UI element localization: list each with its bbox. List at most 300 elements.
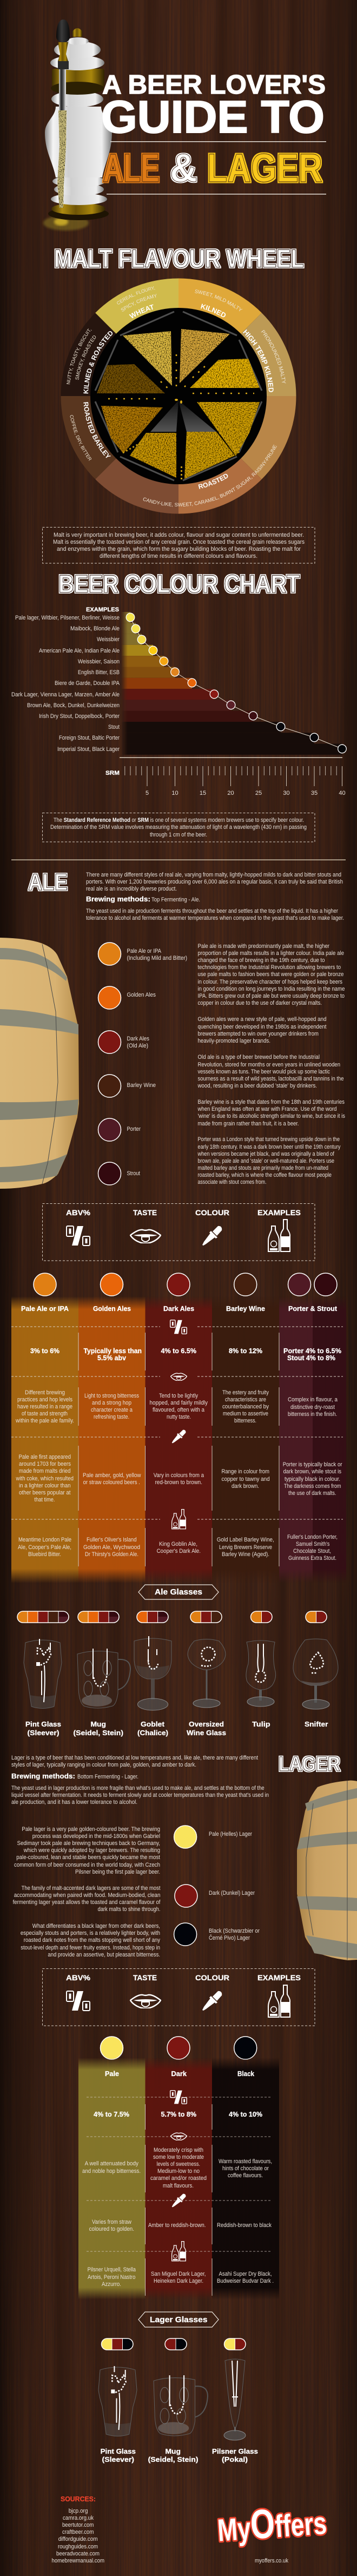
heading: beer colour chart: BEER COLOUR CHART [58,570,300,598]
taste row: hopped, and fairly mildly [149,1400,208,1406]
ale style colour list: Dark Ales [127,1036,149,1042]
lager table colour swatches [101,2037,257,2059]
callout: malt explanation: Malt is very important in brewing beer, it adds colour, flavour and sugar content to unfermented beer. [54,532,304,538]
taste row: levels of sweetness. [157,2161,200,2167]
srm axis: 30 [283,790,290,796]
examples row: Gold Label Barley Wine, [217,1537,274,1543]
ale style descriptions: malted barley and stouts are primarily made from un-malted [198,1165,328,1171]
taste row: nutty taste. [167,1414,191,1420]
lager glass names: Pilsner Glass [212,2447,258,2455]
icon: lips [130,1230,161,1243]
lager glass names: (Seidel, Stein) [148,2455,199,2463]
callout: malt explanation: different lengths of time results in different colours and flavours. [100,553,257,559]
lager style colour list [174,1826,260,1946]
column headers: Barley Wine [226,1305,265,1313]
illustration: lager barrel [297,1781,357,1960]
abv row: 4% to 10% [229,2110,262,2118]
logo: myoffers: MyOffers [216,2497,328,2551]
examples row: King Goblin Ale, [159,1541,197,1547]
colour row: made from malts dried [19,1468,70,1474]
examples row: Cooper's Dark Ale. [157,1548,201,1554]
colour row: Porter is typically black or [283,1461,342,1468]
taste row: within the pale ale family. [15,1418,74,1424]
title [101,70,326,195]
hub shaded wedges [150,400,178,432]
chart example labels: Irish Dry Stout, Doppelbock, Porter [39,713,120,720]
ale style descriptions: roasted barley, which is where the coffee flavour most people [198,1172,332,1178]
ale style descriptions: wood, resulting in a beer dubbed 'stale' by drinkers. [197,1083,317,1089]
ale glass names [25,1720,328,1737]
ale style colour list [98,943,187,1185]
ale style descriptions [197,943,345,1185]
srm axis: SRM [105,770,120,776]
ale glass names: (Seidel, Stein) [74,1729,123,1737]
taste row: some low to moderate [153,2154,204,2160]
icon: lips [171,1373,187,1381]
column headers: Pale [105,2070,119,2078]
colour row: dark brown, while stout is [283,1468,341,1475]
glass: mug [154,2375,208,2436]
malt grain wedges [97,329,260,479]
sources list: SOURCES: [61,2495,96,2503]
examples row: Bluebird Bitter. [28,1551,61,1558]
lager style descriptions: pale-coloured, lean and stable beers quickly became the most [16,1854,160,1861]
examples row: Ale, Cooper's Pale Ale, [18,1544,71,1551]
malt flavour wheel [61,278,296,514]
ale style descriptions: associate with stout comes from. [198,1179,266,1185]
taste row: have resulted in a range [17,1404,72,1410]
sources list: beertutor.com [62,2522,94,2528]
ale comparison table columns [11,1296,346,1583]
ale style descriptions: vessels known as tuns. The beer would pick up some lactic [198,1069,330,1075]
lager style descriptions: and provide an assertive, but pleasant bitterness. [48,1952,160,1958]
lager intro text [11,1755,269,1806]
examples row: Budweiser Budvar Dark . [217,2278,274,2284]
heading: malt flavour wheel: MALT FLAVOUR WHEEL [54,244,304,273]
taste row: characteristics are [225,1396,266,1403]
abv row: Typically less than [83,1347,142,1355]
lager glass colour pills [102,2338,246,2350]
srm axis: 25 [255,790,262,796]
lager glasses illustrations [98,2359,246,2440]
title line: a beer lover's: A BEER LOVER'S [102,70,326,100]
taste row: coffee flavours. [228,2172,263,2179]
lager style descriptions: Pilsner being the first pale lager beer. [75,1869,160,1875]
ale style colour list: Pale Ale or IPA [127,948,162,954]
lager style descriptions: What differentiates a black lager from other dark beers, [32,1923,160,1929]
segment label: wheat: CEREAL, FLOURY, [117,286,155,304]
colour row: or straw coloured beers . [83,1479,140,1486]
examples row: Chocolate Stout, [293,1548,331,1554]
examples row [88,2267,274,2288]
chart example labels: Foreign Stout, Baltic Porter [59,735,120,741]
column headers: Golden Ales [93,1305,131,1313]
taste row: practices and hop levels [17,1396,72,1403]
chart example labels: EXAMPLES [86,607,119,613]
colour row: Varies from straw [92,2219,131,2225]
taste row: caramel and/or roasted [150,2175,207,2182]
icon: dropper [172,2194,186,2207]
pill: pint glass [102,2338,133,2350]
srm axis: 20 [227,790,234,796]
ale style colour list: (Including Mild and Bitter) [127,955,187,961]
legend panel: lager [42,1968,315,2026]
hub frame bevels [95,312,262,480]
examples row: Lervig Brewers Reserve [219,1544,272,1551]
lager style descriptions [13,1826,161,1958]
icon: bottles [172,2242,186,2261]
taste row: of taste and strength [22,1411,68,1417]
lager style descriptions: Sedimayr took pale ale brewing techniques back to Germany, [17,1840,160,1847]
icon: percent [67,1226,90,1246]
title rule upper [110,141,326,142]
segment label: roasted barley [69,400,113,464]
ale style descriptions: when versions became jet black, and was originally a blend of [197,1151,335,1157]
ale glass colour pills [17,1611,327,1623]
chart example labels: English Bitter, ESB [78,669,120,676]
icon: dropper [172,1430,186,1443]
icon: percent [170,2091,187,2104]
examples row: San Miguel Dark Lager, [151,2271,206,2277]
wheel hub [90,308,267,484]
lager style colour list: Black (Schwarzbier or [209,1928,260,1934]
taste row: refreshing taste. [94,1414,129,1420]
colour row: coloured to golden. [89,2226,134,2232]
ale glass names: Wine Glass [187,1729,226,1737]
segment label: roasted: CANDY-LIKE, SWEET, CARAMEL, BURNT SUGAR, RAISINY-PRUNE [143,445,277,507]
colour row: the use of dark malts. [288,1490,336,1497]
colour row: around 1703 for beers [19,1461,71,1467]
taste row: Light to strong bitterness [84,1393,139,1399]
abv row: Porter 4% to 6.5% [283,1347,341,1355]
colour row [89,2219,272,2232]
callout: srm explanation [42,813,315,842]
examples row: Golden Ale, Wychwood [83,1544,140,1551]
colour row: Amber to reddish-brown. [148,2222,206,2229]
abv row: 3% to 6% [30,1347,60,1355]
illustration: ale barrel [0,938,79,1189]
title word: ale: ALE [103,146,160,190]
segment label: kilned and roasted: SMOKEY, ROASTED [75,335,96,380]
abv row [30,1347,341,1362]
column headers [21,1305,338,1313]
column headers: Porter & Strout [288,1305,338,1313]
segment label: kilned and roasted [65,325,115,394]
ale style descriptions: heavily-promoted lager brands. [198,1038,270,1044]
segment label: kilned and roasted: KILNED & ROASTED [83,331,113,394]
colour row: The darkness comes from [284,1483,341,1490]
ale intro text: real ale is an incredibly diverse product. [86,886,177,892]
chart bars [121,612,342,755]
colour row: dark brown. [232,1483,259,1490]
examples row: Dr Thirsty's Golden Ale. [85,1551,138,1558]
heading: lager: LAGER [279,1753,340,1776]
chart example labels: Weissbier, Saison [78,658,120,665]
lager style descriptions: fermenting lager yeast allows the toasted and caramel flavour of [13,1899,161,1906]
title rule lower [107,194,326,195]
beer colour chart [11,607,346,796]
abv row: 4% to 7.5% [94,2110,129,2118]
examples row: Barley Wine (Aged). [222,1551,269,1558]
colour row: copper to tawny and [222,1476,270,1483]
ale style descriptions: copper in colour due to the use of darker crystal malts. [198,1000,322,1006]
chart example labels: Biere de Garde, Double IPA [55,680,120,687]
taste row: medium to assertive [223,1411,268,1417]
icon: bottles [268,1220,290,1251]
ale style descriptions: brewers attempted to win over younger drinkers from [198,1031,319,1037]
lager intro text: Lager is a type of beer that has been conditioned at low temperatures and, like ale, there are many different [11,1755,258,1761]
lager style descriptions: which were quickly adopted by lager brewers. The resulting [23,1847,160,1854]
chart example labels: Dark Lager, Vienna Lager, Marzen, Amber Ale [11,691,120,698]
segment label: roasted barley: ROASTED BARLEY [83,402,111,458]
lager style descriptions: common form of beer consumed in the world today, with Czech [14,1862,160,1868]
chart example labels: Brown Ale, Bock, Dunkel, Dunkelweizen [27,702,120,709]
chart markers [126,613,346,753]
ale style descriptions: changed the face of brewing in the 19th century, due to [198,957,325,964]
lager style descriptions: dark malts to shine through. [98,1906,160,1913]
taste row: Tend to be lightly [159,1393,198,1399]
segment label: kilned: SWEET, MILD MALTY [195,289,242,312]
taste row: malt flavours. [163,2183,194,2189]
segment label: wheat: WHEAT [129,304,154,318]
lager glass names [101,2447,258,2463]
colour row: Pale amber, gold, yellow [83,1472,141,1479]
legend panel: lager: ABV% [66,1973,91,1982]
chart example labels: Stout [108,724,120,730]
icon: dropper [202,1991,222,2011]
ale style descriptions: Golden ales were a new style of pale, well-hopped and [198,1016,327,1023]
chart example labels: Pale lager, Witbier, Pilsener, Berliner, Weisse [15,615,120,621]
badge: ale glasses: Ale Glasses [155,1587,202,1597]
ale glass names: Goblet [141,1720,165,1728]
lager style descriptions: especially stouts and porters, is a relatively lighter body, with [21,1930,160,1936]
ale glass names: (Chalice) [137,1729,168,1737]
badge: ale glasses [138,1585,219,1599]
lager intro text: styles of lager, typically ranging in colour from pale, golden, and amber to dark. [11,1762,196,1768]
ale intro text: Top Fermenting - Ale. [151,897,200,903]
srm axis: 40 [339,790,346,796]
abv row: 5.7% to 8% [161,2110,196,2118]
segment label: roasted barley: COFFEE, DRY, BITTER [70,415,91,461]
segment label: kilned and roasted: NUTTY, TOASTY, BISCUIT, [67,328,92,384]
abv row: 5.5% abv [97,1354,127,1362]
badge: lager glasses: Lager Glasses [150,2315,208,2324]
sources list: beeradvocate.com [56,2551,100,2557]
sources list: craftbeer.com [62,2529,94,2535]
colour row: typically black in colour. [285,1476,340,1483]
abv row: 8% to 12% [229,1347,262,1355]
ale style descriptions: when England was often at war with France. Use of the word [197,1106,336,1112]
pill: goblet [137,1611,168,1623]
glass: snifter [293,1639,338,1709]
taste row: Moderately crisp with [154,2147,203,2153]
title word: lager: LAGER [207,146,322,190]
ale style colour list: (Old Ale) [127,1043,148,1049]
taste row: bitterness in the finish. [288,1411,337,1418]
lager style descriptions: The family of malt-accented dark lagers are some of the most [22,1885,160,1892]
icon: bottles [172,1510,186,1529]
examples row: Meantime London Pale [18,1537,71,1543]
abv row [94,2110,262,2118]
ale style descriptions: Pale ale is made with predominantly pale malt, the higher [198,943,329,950]
examples row: Asahi Super Dry Black, [219,2271,272,2277]
column headers [105,2070,255,2078]
srm axis: 10 [171,790,178,796]
segment label: wheat: SPICY, CREAMY [121,294,157,312]
taste row: A well attenuated body [85,2160,138,2167]
ale style colour list: Porter [127,1126,141,1132]
pill: pilsner glass [224,2338,246,2350]
glass: pint [24,1639,62,1709]
lager style descriptions: roasted dark notes from the malts stopping well short of any [24,1937,160,1943]
ale glass names: Mug [91,1720,106,1728]
taste row: hints of chocolate or [222,2165,269,2172]
lager intro text: ale production, and it has a lower tolerance to alcohol. [11,1799,137,1806]
title ampersand: & [170,146,197,190]
chart example labels: American Pale Ale, Indian Pale Ale [39,648,120,654]
colour row [16,1454,342,1503]
pill: tulip [251,1611,273,1623]
column headers: Dark Ales [163,1305,194,1313]
icon: lips [130,1995,161,2008]
colour row: Reddish-brown to black [217,2222,272,2229]
segment label: roasted: ROASTED [198,474,228,489]
ale style descriptions: made from grain rather than fruit, it is a beer. [198,1121,299,1127]
taste row: and noble hop bitterness. [82,2168,141,2175]
lager style colour list: Černé Pivo) Lager [209,1934,250,1941]
lager style colour list: Dark (Dunkel) Lager [209,1890,255,1896]
lager glass names: (Pokal) [222,2455,248,2463]
ale glasses illustrations [24,1636,338,1710]
examples row: Fuller's London Porter, [287,1534,338,1540]
ale intro text [86,872,344,921]
column headers: Dark [171,2070,187,2078]
column headers: Pale Ale or IPA [21,1305,69,1313]
chart example labels: Weissbier [97,636,120,643]
examples row: Artois, Peroni Nastro [88,2274,135,2281]
colour row: that time. [35,1497,55,1503]
abv row: Stout 4% to 8% [287,1354,335,1362]
srm axis: 15 [200,790,206,796]
ale glass names: (Sleever) [27,1729,60,1737]
taste row: counterbalanced by [222,1404,269,1410]
ale table colour swatches [34,1273,337,1296]
lager glass names: (Sleever) [102,2455,134,2463]
taste row: flavoured, often with a [153,1407,205,1413]
ale glass names: Tulip [252,1720,270,1728]
legend panel: lager: EXAMPLES [257,1973,301,1982]
taste row: bitterness. [234,1418,256,1424]
chart connecting line [130,617,342,749]
ale style colour list: Strout [127,1170,140,1177]
lager comparison table columns [78,2058,279,2300]
taste row: Complex in flavour, a [288,1396,338,1403]
lager style descriptions: Pale lager is a very pale golden-coloured beer. The brewing [22,1826,160,1833]
colour row: Vary in colours from a [154,1472,204,1479]
icon: lips [171,2133,187,2140]
pill: pint glass [17,1611,69,1623]
sources list: diffordguide.com [58,2536,98,2542]
legend panel: ale: EXAMPLES [257,1208,301,1217]
examples row [18,1534,338,1562]
logo: myoffers: myoffers.co.uk [255,2558,288,2564]
sources list [52,2495,104,2564]
lager comparison table [82,2070,274,2296]
lager intro text: liquid vessel after fermentation. It needs to ferment slowly and at cooler temperatures than the yeast that's used in [11,1792,269,1798]
pill: mug [165,2338,187,2350]
sources list: homebrewmanual.com [52,2558,104,2564]
beer tap tower illustration [43,19,112,230]
icon: bottles [268,1985,290,2017]
callout: malt explanation: Malt is essentially the toasted version of any cereal grain. Once toasted the cereal grain releases sugars [53,539,305,545]
callout: srm explanation: The Standard Reference Method or SRM is one of several systems modern brewers use to specify beer colour. [54,817,304,823]
ale style colour list: Barley Wine [127,1082,156,1089]
glass: oversized wine [188,1639,226,1708]
lager intro text: The yeast used in lager production is more fragile than what's used to make ale, and settles at the bottom of the [11,1785,265,1791]
taste row: and a strong hop [92,1400,131,1406]
pill: snifter [306,1611,327,1623]
sources list: roughguides.com [58,2544,98,2550]
segment label: kilned: KILNED [201,304,226,317]
callout: malt explanation [42,527,315,563]
lager intro text: Brewing methods: [11,1772,75,1780]
legend panel: ale: ABV% [66,1208,91,1217]
colour row: red-brown to brown. [155,1479,202,1486]
pill: mug [78,1611,119,1623]
srm axis: 5 [146,790,149,796]
callout: srm explanation: Determination of the SRM value involves measuring the attenuation of light of a wavelength (430 nm) in passing [50,824,307,831]
examples row: Samuel Smith's [296,1541,330,1547]
lager intro text: Bottom Fermenting - Lager. [77,1774,138,1780]
taste row: The estery and fruity [222,1389,269,1396]
colour row: with coke, which resulted [16,1475,74,1482]
examples row: Heineken Dark Lager. [154,2278,203,2284]
taste row: Different brewing [25,1389,65,1396]
badge: lager glasses [138,2312,219,2327]
ale glass names: Pint Glass [25,1720,61,1728]
title line: guide to: GUIDE TO [101,91,325,142]
column headers: Black [237,2070,255,2078]
ale style descriptions: brown ale, pale ale and 'stale' or well-matured ale. Porters use [198,1158,334,1164]
glass: pint [98,2366,137,2436]
lager style descriptions: stout-level depth and fewer fruity esters. Instead, hops step in [21,1945,160,1951]
examples row: Fuller's Oliver's Island [87,1537,136,1543]
ale comparison table [11,1305,343,1566]
icon: percent [170,1320,187,1334]
sources list: camra.org.uk [63,2515,94,2521]
lager style descriptions: process was developed in the mid-1800s when Gabriel [32,1833,160,1840]
examples row: Guinness Extra Stout. [288,1555,336,1562]
legend panel: ale [42,1203,315,1261]
logo: myoffers [216,2497,328,2564]
colour row: Range in colour from [222,1468,269,1475]
examples row: Pilsner Urquell, Stella [88,2267,136,2273]
icon: percent [67,1991,90,2011]
segment label: wheat [117,286,157,318]
chart example labels: Imperial Stout, Black Lager [57,746,120,753]
sources list: bjcp.org [69,2508,88,2514]
legend panel: ale: COLOUR [195,1208,229,1217]
icon: dropper [202,1226,222,1246]
chart example labels: Maibock, Blonde Ale [70,625,120,632]
ale glass names: Snifter [305,1720,328,1728]
ale glass names: Oversized [189,1720,224,1728]
colour row: Pale ale first appeared [18,1454,71,1460]
segment label: high temp kilned: HIGH TEMP KILNED [243,329,274,392]
chart example labels [11,607,120,753]
colour row: in a lighter colour than [19,1483,70,1489]
ale style colour list: Golden Ales [127,992,156,998]
